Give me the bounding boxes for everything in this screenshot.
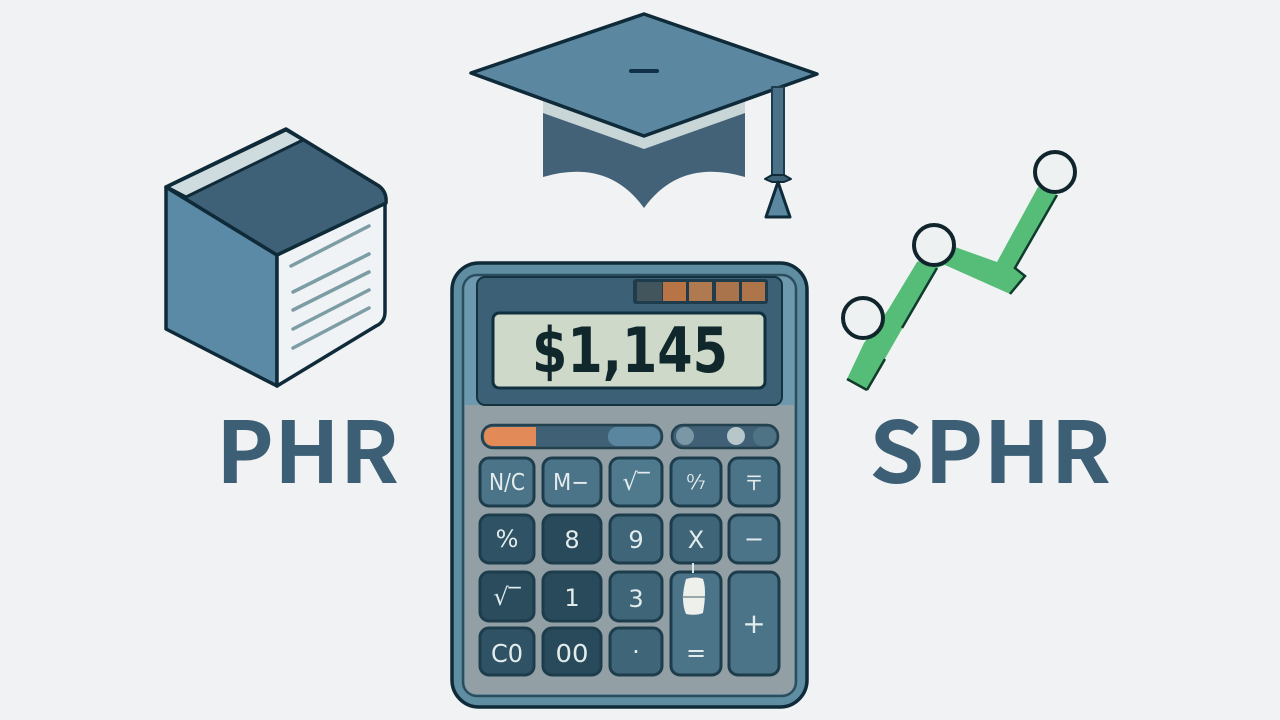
key labels: 00 [556,639,588,668]
heading: SPHR: SPHR [869,385,1111,508]
key labels: √‾ [493,583,522,611]
calculator body [452,263,807,707]
key labels: C0 [491,639,523,668]
key labels: 9 [628,526,644,554]
key labels: − [744,525,764,553]
key labels: ⁰⁄₇ [686,470,706,494]
indicator strip [633,279,768,304]
key labels: % [496,525,518,553]
LCD readout: $1,145 [532,314,728,387]
key labels [489,468,766,668]
icon: growth line chart [843,152,1075,390]
key labels: 3 [628,585,644,613]
key labels: + [742,607,766,640]
calculator [452,263,807,707]
key labels: 1 [564,584,580,612]
key labels: X [688,526,704,554]
key labels: √‾ [622,468,651,496]
key labels: = [686,639,706,667]
key labels: 〒 [744,471,764,495]
key labels: · [632,638,640,666]
icon: graduation cap [471,14,817,217]
function bars [482,425,778,448]
icon: book [166,129,386,386]
key labels: M− [553,470,589,496]
key labels: 8 [564,526,580,554]
display panel [477,277,782,405]
keypad [480,458,779,675]
heading: PHR: PHR [216,385,399,508]
white cursor mark [682,563,705,615]
key labels: N/C [489,470,525,496]
